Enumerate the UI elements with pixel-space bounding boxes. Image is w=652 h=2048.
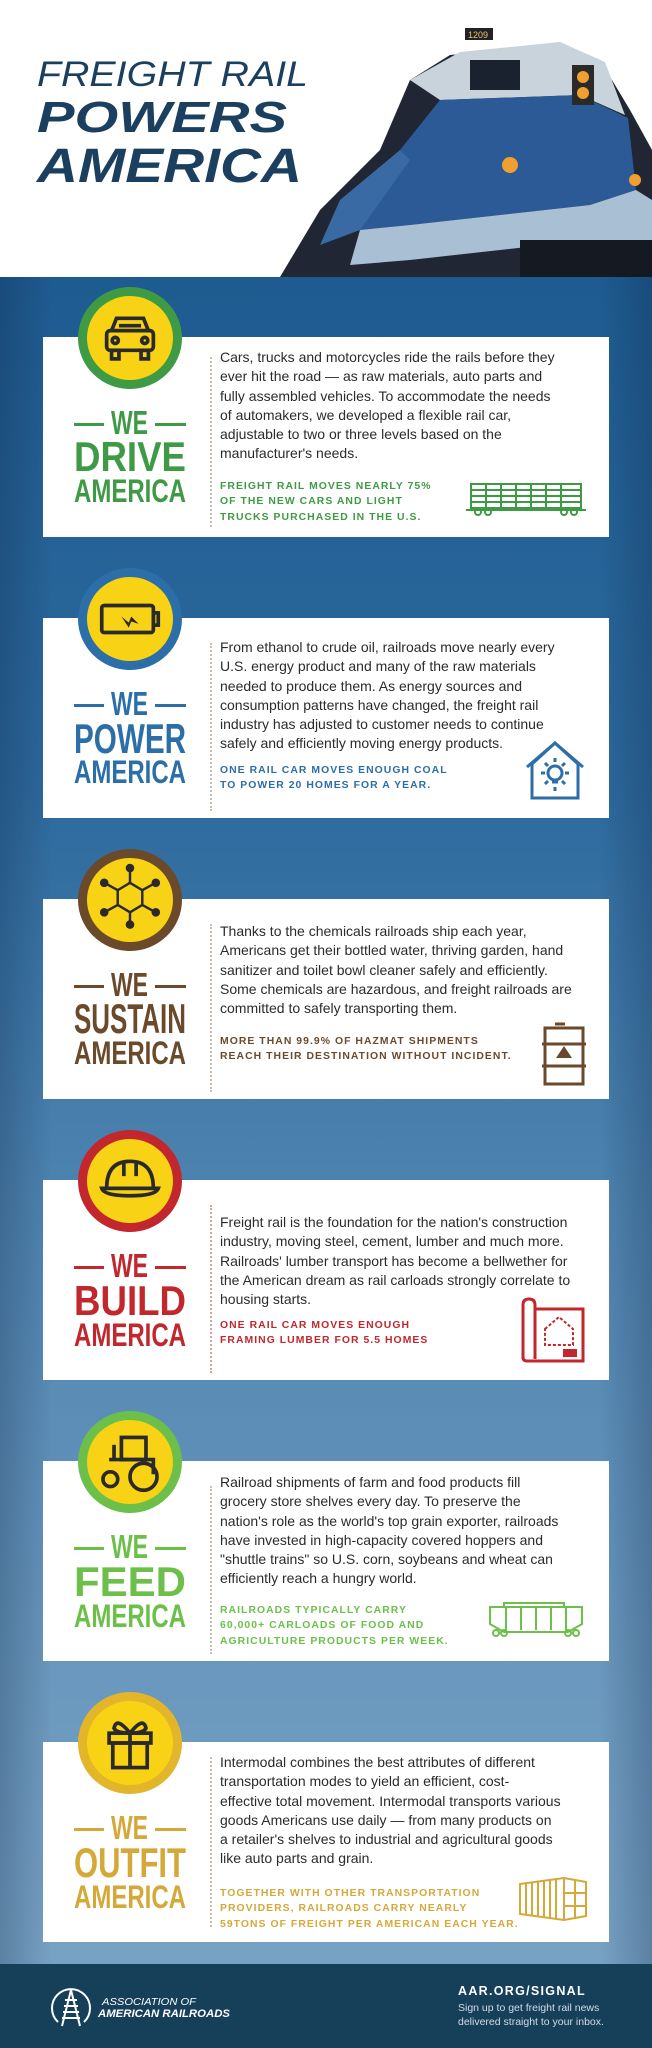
body text: Intermodal combines the best attributes of different xyxy=(220,1754,535,1770)
body text xyxy=(220,923,572,1016)
icon: battery xyxy=(78,568,182,670)
body text: Americans get their bottled water, thriving garden, hand xyxy=(220,942,563,958)
stat: AGRICULTURE PRODUCTS PER WEEK. xyxy=(220,1636,449,1647)
body text: have invested in high-capacity covered hoppers and xyxy=(220,1532,543,1548)
body text: From ethanol to crude oil, railroads move nearly every xyxy=(220,639,555,655)
stat: MORE THAN 99.9% OF HAZMAT SHIPMENTS xyxy=(220,1036,479,1047)
heading: FEED xyxy=(74,1558,186,1605)
call to action: delivered straight to your inbox. xyxy=(458,2016,604,2028)
stat xyxy=(220,1036,512,1062)
heading: WE xyxy=(111,966,148,1003)
body text: nation's role as the world's top grain exporter, railroads xyxy=(220,1513,558,1529)
stat: TO POWER 20 HOMES FOR A YEAR. xyxy=(220,780,431,791)
heading xyxy=(74,1528,186,1634)
body text: the American dream as rail carloads strongly correlate to xyxy=(220,1272,570,1288)
stat: RAILROADS TYPICALLY CARRY xyxy=(220,1605,407,1616)
stat: 59TONS OF FREIGHT PER AMERICAN EACH YEAR. xyxy=(220,1919,519,1930)
stat: 60,000+ CARLOADS OF FOOD AND xyxy=(220,1620,424,1631)
body text: U.S. energy product and many of the raw materials xyxy=(220,658,536,674)
body text: Some chemicals are hazardous, and freight railroads are xyxy=(220,981,572,997)
heading: WE xyxy=(111,404,148,441)
heading xyxy=(74,685,186,790)
body text xyxy=(220,349,555,461)
heading: WE xyxy=(111,685,148,722)
body text: needed to produce them. As energy sources and xyxy=(220,678,522,694)
panel: we power america xyxy=(43,568,609,818)
stat: OF THE NEW CARS AND LIGHT xyxy=(220,496,403,507)
body text: Thanks to the chemicals railroads ship each year, xyxy=(220,923,527,939)
icon: container xyxy=(519,1877,587,1921)
body text: goods Americans use daily — from many products on xyxy=(220,1812,552,1828)
body text xyxy=(220,1474,558,1586)
title xyxy=(36,55,308,190)
panel: we feed america xyxy=(43,1411,609,1661)
stat: ONE RAIL CAR MOVES ENOUGH xyxy=(220,1320,410,1331)
stat: ONE RAIL CAR MOVES ENOUGH COAL xyxy=(220,765,448,776)
icon: molecule xyxy=(78,849,182,951)
stat xyxy=(220,481,432,523)
stat: TRUCKS PURCHASED IN THE U.S. xyxy=(220,512,421,523)
body text: industry has adjusted to customer needs to continue xyxy=(220,716,544,732)
panel: we build america xyxy=(43,1130,609,1380)
body text: Cars, trucks and motorcycles ride the rails before they xyxy=(220,349,555,365)
body text: sanitizer and toilet bowl cleaner safely and efficiently. xyxy=(220,962,548,978)
icon: car xyxy=(78,287,182,389)
stat: REACH THEIR DESTINATION WITHOUT INCIDENT. xyxy=(220,1051,512,1062)
stat xyxy=(220,765,448,791)
logo xyxy=(51,1988,231,2026)
illustration: locomotive xyxy=(280,28,652,277)
body text: safely and efficiently moving energy products. xyxy=(220,735,503,751)
panel: we sustain america xyxy=(43,849,609,1099)
stat: PROVIDERS, RAILROADS CARRY NEARLY xyxy=(220,1903,467,1914)
panel: we outfit america xyxy=(43,1692,609,1942)
body text: a retailer's shelves to industrial and agricultural goods xyxy=(220,1831,553,1847)
call to action: Sign up to get freight rail news xyxy=(458,2002,599,2014)
stat: FRAMING LUMBER FOR 5.5 HOMES xyxy=(220,1335,428,1346)
body text: ever hit the road — as raw materials, auto parts and xyxy=(220,368,542,384)
body text: consumption patterns have changed, the freight rail xyxy=(220,697,538,713)
body text: fully assembled vehicles. To accommodate the needs xyxy=(220,388,550,404)
body text xyxy=(220,1214,570,1307)
illustration: locomotive: 1209 xyxy=(468,30,488,40)
body text: Railroad shipments of farm and food products fill xyxy=(220,1474,520,1490)
body text: efficiently reach a hungry world. xyxy=(220,1570,417,1586)
heading xyxy=(74,1809,186,1915)
panel: we drive america xyxy=(43,287,609,537)
heading: WE xyxy=(111,1247,148,1284)
body text: effective total movement. Intermodal transports various xyxy=(220,1793,561,1809)
icon: house with bulb xyxy=(526,741,584,800)
heading xyxy=(74,1247,186,1353)
body text: grocery store shelves every day. To preserve the xyxy=(220,1493,521,1509)
logo: AMERICAN RAILROADS xyxy=(97,2008,231,2020)
body text: "shuttle trains" so U.S. corn, soybeans and wheat can xyxy=(220,1551,553,1567)
body text: Railroads' lumber transport has become a bellwether for xyxy=(220,1253,567,1269)
call to action: AAR.ORG/SIGNAL xyxy=(458,1984,586,1998)
title: POWERS xyxy=(37,93,287,142)
icon: auto rack rail car xyxy=(466,483,586,516)
stat xyxy=(220,1888,519,1930)
body text: committed to safely transporting them. xyxy=(220,1000,457,1016)
heading: BUILD xyxy=(74,1277,186,1324)
heading xyxy=(74,404,186,509)
white box xyxy=(43,337,609,537)
icon: hopper car xyxy=(489,1602,583,1637)
heading: WE xyxy=(111,1809,148,1846)
heading xyxy=(74,966,186,1071)
heading: WE xyxy=(111,1528,148,1565)
stat xyxy=(220,1320,428,1346)
logo: ASSOCIATION OF xyxy=(101,1996,197,2008)
icon: hard hat xyxy=(78,1130,182,1232)
body text xyxy=(220,1754,561,1866)
body text: transportation modes to yield an efficient, cost- xyxy=(220,1773,509,1789)
title: FREIGHT RAIL xyxy=(37,55,308,94)
body text: adjustable to two or three levels based on the xyxy=(220,426,502,442)
stat xyxy=(220,1605,449,1647)
icon: tractor xyxy=(78,1411,182,1513)
icon: barrel xyxy=(542,1022,586,1086)
body text xyxy=(220,639,555,751)
call to action xyxy=(458,1984,604,2028)
body text: manufacturer's needs. xyxy=(220,445,358,461)
heading: DRIVE xyxy=(74,433,186,480)
icon: blueprint xyxy=(522,1298,584,1362)
body text: like auto parts and grain. xyxy=(220,1850,373,1866)
body text: industry, moving steel, cement, lumber and much more. xyxy=(220,1233,564,1249)
stat: FREIGHT RAIL MOVES NEARLY 75% xyxy=(220,481,432,492)
footer xyxy=(0,1964,652,2048)
stat: TOGETHER WITH OTHER TRANSPORTATION xyxy=(220,1888,480,1899)
icon: gift xyxy=(78,1692,182,1794)
body text: housing starts. xyxy=(220,1291,311,1307)
body text: Freight rail is the foundation for the nation's construction xyxy=(220,1214,567,1230)
body text: of automakers, we developed a flexible rail car, xyxy=(220,407,511,423)
